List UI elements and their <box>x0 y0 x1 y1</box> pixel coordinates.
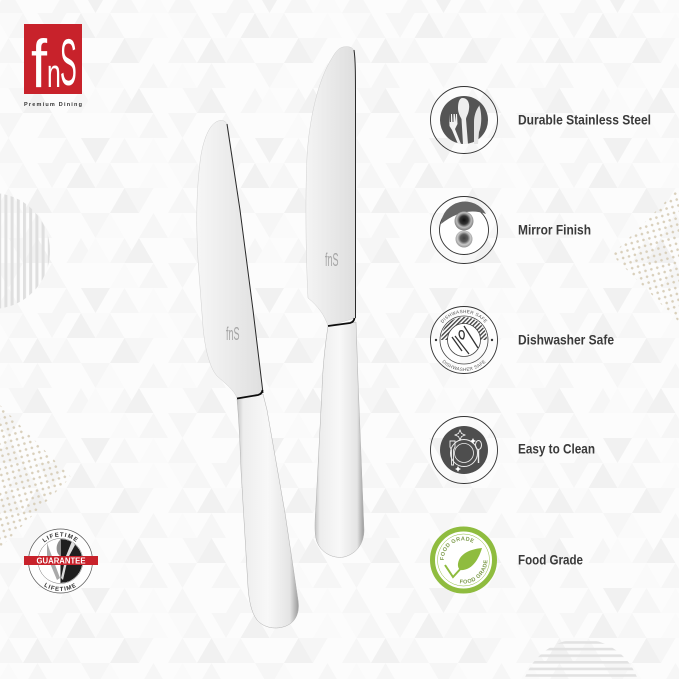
icon: food grade leaf badge: FOOD GRADE <box>440 536 474 560</box>
blade spine highlight <box>354 50 356 318</box>
blade <box>197 120 263 398</box>
feature: Easy to Clean <box>430 416 595 484</box>
badge: lifetime guarantee: GUARANTEE <box>36 556 86 566</box>
decoration: right dotted diamond <box>612 188 679 322</box>
badge: lifetime guarantee: LIFETIME <box>44 582 76 591</box>
left knife <box>197 120 298 628</box>
label: Dishwasher Safe <box>518 332 614 348</box>
icon: food grade leaf badge <box>430 526 497 594</box>
decoration: bottom striped semicircle <box>524 639 638 679</box>
engraved logo: fnS <box>226 325 239 345</box>
handle <box>237 394 298 628</box>
logo: FnS Premium Dining: f <box>31 27 47 102</box>
handle <box>315 322 364 557</box>
right knife <box>306 47 364 557</box>
decoration: left striped semicircle <box>0 193 50 309</box>
feature: Durable Stainless Steel <box>430 86 651 154</box>
icon: dishwasher safe badge: DISHWASHER SAFE <box>442 360 486 371</box>
blade <box>306 47 356 326</box>
blade spine highlight <box>227 124 263 393</box>
feature: Dishwasher Safe <box>430 306 614 374</box>
label: Easy to Clean <box>518 442 595 456</box>
icon: food grade leaf badge: FOOD GRADE <box>460 560 488 584</box>
label: Durable Stainless Steel <box>518 112 651 128</box>
icon: dishwasher safe badge <box>430 306 498 374</box>
logo: FnS Premium Dining: S <box>60 26 77 100</box>
logo: FnS Premium Dining <box>24 24 82 108</box>
feature: Food Grade <box>430 526 583 594</box>
icon: dishwasher safe badge: DISHWASHER SAFE <box>440 310 488 324</box>
decoration: left dotted diamond <box>0 405 71 548</box>
badge: lifetime guarantee: LIFETIME <box>42 532 78 542</box>
label: Food Grade <box>518 552 583 568</box>
engraved logo: fnS <box>325 251 338 271</box>
feature: Mirror Finish <box>430 196 591 264</box>
logo: FnS Premium Dining: n <box>47 52 61 97</box>
icon: cutlery <box>430 86 498 154</box>
label: Mirror Finish <box>518 222 591 238</box>
icon: clean plate <box>430 416 498 484</box>
bolster shadow line <box>328 318 354 326</box>
logo: FnS Premium Dining: Premium Dining <box>24 102 82 108</box>
badge: lifetime guarantee <box>24 528 98 594</box>
bolster shadow line <box>237 390 262 398</box>
icon: mirror spheres <box>430 196 498 264</box>
